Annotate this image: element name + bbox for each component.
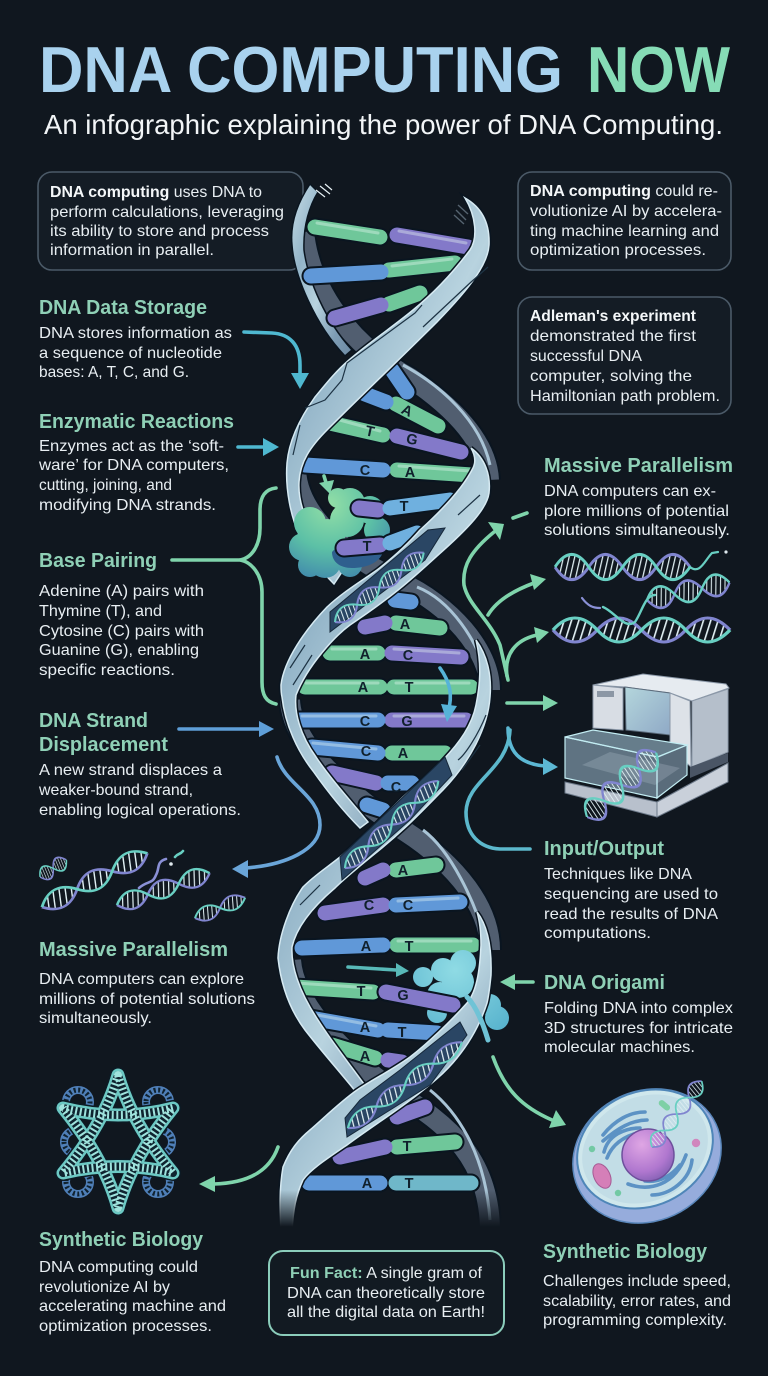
panel: DNA computing intro [38, 172, 303, 270]
base letters: T [403, 1139, 412, 1155]
icon: right DNA cluster [553, 550, 732, 642]
text block: Base Pairing: Base Pairing [39, 550, 157, 572]
base letters [357, 402, 419, 1192]
subtitle: An infographic explaining the power of DNA Computing. [44, 109, 723, 140]
base letters: C [403, 648, 414, 664]
base letters: T [400, 499, 409, 515]
title: NOW [587, 33, 731, 106]
panel: Adleman's experiment: successful DNA [530, 348, 642, 365]
base letters: T [398, 1025, 407, 1041]
text block: DNA Data Storage: DNA stores information as [39, 325, 232, 342]
text block: DNA Strand Displacement [38, 710, 241, 819]
text block: DNA Strand Displacement: A new strand displaces a [39, 762, 222, 779]
callout: Fun Fact: DNA can theoretically store [287, 1285, 485, 1302]
panel: AI callout: DNA computing could re- [530, 183, 718, 200]
text block: Massive Parallelism (right) [544, 455, 733, 539]
ribbon 1 [287, 198, 489, 584]
base letters: A [361, 939, 372, 955]
panel: Adleman's experiment: Hamiltonian path problem. [530, 388, 720, 405]
text block: Synthetic Biology (right): Challenges include speed, [543, 1273, 731, 1290]
DNA window in ribbon 3 [340, 757, 452, 880]
text block: Massive Parallelism (right): solutions simultaneously. [544, 522, 730, 539]
reticulum [628, 1155, 692, 1195]
golgi [603, 1112, 647, 1158]
arrow: curve to left DNA cluster [232, 757, 320, 878]
icon: DNA origami star [63, 1075, 173, 1208]
panel: AI callout: optimization processes. [530, 242, 706, 259]
bracket: base pairing [172, 488, 276, 704]
panel: AI callout [518, 172, 731, 270]
base letters: C [403, 898, 414, 914]
base letters: A [399, 402, 415, 421]
text block: Massive Parallelism (left): DNA computers can explore [39, 971, 244, 988]
base letters: C [360, 714, 371, 730]
text block: DNA Strand Displacement: DNA Strand [39, 710, 148, 732]
text block: Input/Output: Techniques like DNA [544, 866, 692, 883]
text block: Synthetic Biology (right): programming complexity. [543, 1312, 727, 1329]
arrow: to cell [493, 1057, 566, 1128]
text block: DNA Origami: 3D structures for intricate [544, 1020, 733, 1037]
base letters: T [357, 984, 366, 1000]
text block: Base Pairing: Guanine (G), enabling [39, 642, 199, 659]
base letters: T [405, 680, 414, 696]
text block: Enzymatic Reactions: cutting, joining, and [39, 477, 172, 494]
panel: DNA computing intro: perform calculations, leveraging [50, 204, 284, 221]
text block: Synthetic Biology (left): Synthetic Biology [39, 1229, 204, 1251]
text block: DNA Origami: DNA Origami [544, 972, 665, 994]
panel: DNA computing intro: information in parallel. [50, 242, 214, 259]
DNA window in ribbon 2 [330, 528, 445, 632]
text block: DNA Data Storage: bases: A, T, C, and G. [39, 364, 189, 381]
base letters: G [401, 714, 413, 730]
text block: Synthetic Biology (left): optimization processes. [39, 1318, 212, 1335]
text block: Synthetic Biology (left) [39, 1229, 226, 1335]
star ribbons [63, 1075, 173, 1208]
base letters: A [362, 1176, 373, 1192]
text block: Enzymatic Reactions: modifying DNA strands. [39, 497, 216, 514]
base letters: T [405, 1176, 414, 1192]
text block: Input/Output: read the results of DNA [544, 906, 718, 923]
text block: Base Pairing: specific reactions. [39, 662, 175, 679]
nucleus [622, 1129, 674, 1181]
text block: Massive Parallelism (left): Massive Parallelism [39, 939, 228, 961]
text block: Base Pairing: Adenine (A) pairs with [39, 583, 204, 600]
text block: Massive Parallelism (left): millions of potential solutions [39, 991, 255, 1008]
text block: Synthetic Biology (right): scalability, error rates, and [543, 1293, 731, 1310]
text block: DNA Origami: molecular machines. [544, 1039, 695, 1056]
arrow: to sequencer [507, 695, 558, 711]
text block: Input/Output: sequencing are used to [544, 886, 718, 903]
text block: Synthetic Biology (right): Synthetic Biology [543, 1241, 708, 1263]
arrow: input/output connector [466, 730, 530, 849]
panel: Adleman's experiment: computer, solving the [530, 368, 692, 385]
arrow: to right parallelism [464, 522, 508, 680]
text block: Input/Output [544, 838, 718, 942]
arrow: to origami star [199, 1147, 278, 1192]
title: DNA COMPUTING [39, 33, 563, 106]
base letters: A [405, 465, 416, 481]
panel: Adleman's experiment: Adleman's experiment [530, 308, 697, 325]
base letters: A [360, 1049, 371, 1065]
dash accent [513, 513, 527, 518]
arrow: to helix strands 2 [507, 627, 549, 676]
panel: AI callout: volutionize AI by accelera- [530, 203, 722, 220]
base letters: C [364, 898, 375, 914]
base letters: C [360, 463, 371, 479]
ribbon 2 [281, 448, 489, 828]
arrow: strand displacement [179, 721, 274, 737]
panel: DNA computing intro: its ability to store and process [50, 223, 269, 240]
text block: Synthetic Biology (left): accelerating machine and [39, 1298, 226, 1315]
text block: Base Pairing: Cytosine (C) pairs with [39, 623, 204, 640]
base letters: G [405, 431, 419, 449]
text block: DNA Data Storage: DNA Data Storage [39, 297, 207, 319]
arrow: enzymatic reactions [238, 438, 279, 456]
enzyme cloud: green [289, 488, 390, 578]
text block: Base Pairing [39, 550, 204, 679]
DNA double helix [265, 184, 509, 1236]
enzyme tail [467, 997, 488, 1040]
DNA window in ribbon 4 [344, 1022, 467, 1137]
text block: DNA Strand Displacement: Displacement [39, 734, 168, 756]
arrow: inside helix, green [319, 476, 334, 494]
panel: Adleman's experiment [518, 297, 731, 414]
icon: cell [551, 1065, 743, 1247]
callout: Fun Fact [269, 1251, 504, 1335]
base letters: T [364, 423, 376, 441]
text block: Massive Parallelism (right): plore millions of potential [544, 503, 729, 520]
base letters: G [397, 988, 409, 1004]
base letters: A [398, 863, 409, 879]
text block: Synthetic Biology (left): DNA computing could [39, 1259, 198, 1276]
icon: sequencer machine [565, 674, 729, 826]
text block: Enzymatic Reactions: Enzymatic Reactions [39, 411, 234, 433]
rungs over the green cloud [344, 500, 450, 548]
panel: DNA computing intro: DNA computing uses DNA to [50, 184, 262, 201]
arrow: DNA origami [500, 974, 533, 990]
text block: Massive Parallelism (left) [39, 939, 255, 1027]
arrow: inside helix, teal [348, 963, 409, 977]
arrow: to sequencer, blue [508, 728, 558, 775]
icon: left DNA cluster [36, 845, 248, 925]
text block: Enzymatic Reactions: Enzymes act as the ‘soft- [39, 438, 224, 455]
text block: Enzymatic Reactions [38, 411, 234, 514]
base letters: A [360, 647, 371, 663]
text block: Input/Output: Input/Output [544, 838, 664, 860]
ribbon 4 [280, 912, 491, 1232]
text block: DNA Origami: Folding DNA into complex [544, 1000, 733, 1017]
back strands [290, 184, 490, 1232]
text block: Massive Parallelism (right): Massive Parallelism [544, 455, 733, 477]
text block: DNA Origami [544, 972, 733, 1056]
callout: Fun Fact: all the digital data on Earth! [287, 1304, 485, 1321]
mitochondrion [589, 1161, 615, 1191]
text block: Synthetic Biology (left): revolutionize AI by [39, 1279, 170, 1296]
panel: Adleman's experiment: demonstrated the first [530, 328, 697, 345]
callout: Fun Fact: Fun Fact: A single gram of [290, 1265, 483, 1282]
text block: Enzymatic Reactions: ware’ for DNA computers, [38, 457, 229, 474]
text block: DNA Data Storage [39, 297, 232, 381]
text block: Base Pairing: Thymine (T), and [39, 603, 162, 620]
text block: DNA Strand Displacement: weaker-bound strand, [38, 782, 193, 799]
arrow: data storage to helix [244, 332, 309, 389]
base letters: A [398, 746, 409, 762]
front ribbons [278, 198, 491, 1232]
panel: AI callout: ting machine learning and [530, 223, 719, 240]
text block: DNA Data Storage: a sequence of nucleotide [39, 345, 222, 362]
arrow: to helix strands 1 [488, 574, 546, 615]
text block: DNA Strand Displacement: enabling logical operations. [39, 802, 241, 819]
base letters: T [405, 939, 414, 955]
enzyme cloud: teal [386, 950, 509, 1030]
text block: Input/Output: computations. [544, 925, 651, 942]
text block: Massive Parallelism (left): simultaneously. [39, 1010, 152, 1027]
base pair rungs [295, 223, 473, 1183]
base letters: C [391, 780, 402, 796]
helix bottom fade [265, 1190, 505, 1236]
arrow: inside helix, blue [440, 668, 457, 722]
base letters: A [358, 680, 369, 696]
text block: Massive Parallelism (right): DNA computers can ex- [544, 483, 716, 500]
outer loops [64, 1090, 172, 1194]
base letters: A [400, 617, 411, 633]
base letters: A [360, 1020, 371, 1036]
base letters: C [361, 744, 372, 760]
ribbon 3 [278, 640, 490, 1092]
base letters: T [363, 539, 372, 555]
text block: Synthetic Biology (right) [543, 1241, 731, 1329]
